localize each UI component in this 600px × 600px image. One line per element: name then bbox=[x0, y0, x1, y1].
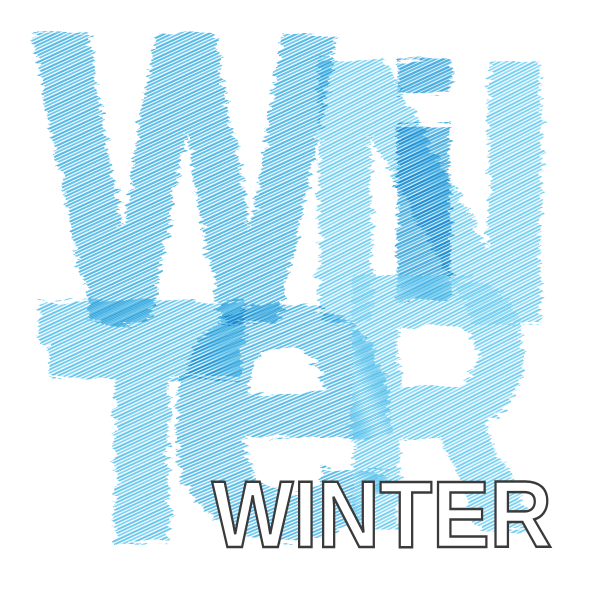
scribbled winter typographic artwork bbox=[30, 31, 552, 548]
scribbled letter N bbox=[312, 56, 548, 327]
scribbled letter R bbox=[346, 274, 528, 534]
outlined WINTER title: WINTER bbox=[212, 462, 552, 568]
scribbled letter i bbox=[392, 56, 456, 303]
scribbled letter e bbox=[170, 295, 395, 545]
scribbled letter W bbox=[30, 31, 340, 328]
scribbled letter T bbox=[35, 295, 255, 550]
